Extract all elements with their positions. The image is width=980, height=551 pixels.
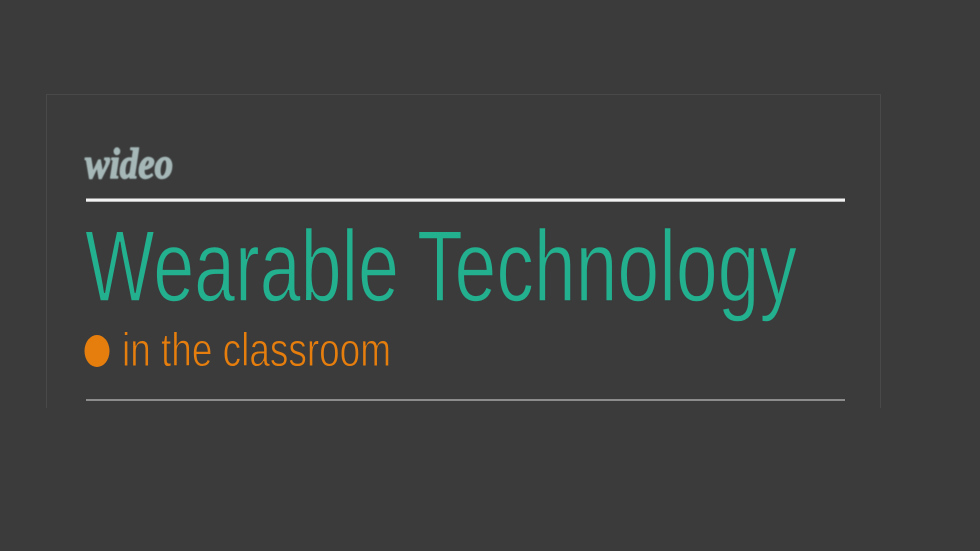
subtitle: in the classroom xyxy=(122,323,391,376)
subtitle bullet xyxy=(84,335,110,367)
logo: wideo: wideo xyxy=(85,141,173,188)
title: Wearable xyxy=(85,211,399,323)
title xyxy=(85,211,797,323)
bottom rule xyxy=(86,399,845,401)
top rule xyxy=(86,198,845,202)
panel: card outline xyxy=(46,94,880,408)
title: Technology xyxy=(417,211,797,323)
